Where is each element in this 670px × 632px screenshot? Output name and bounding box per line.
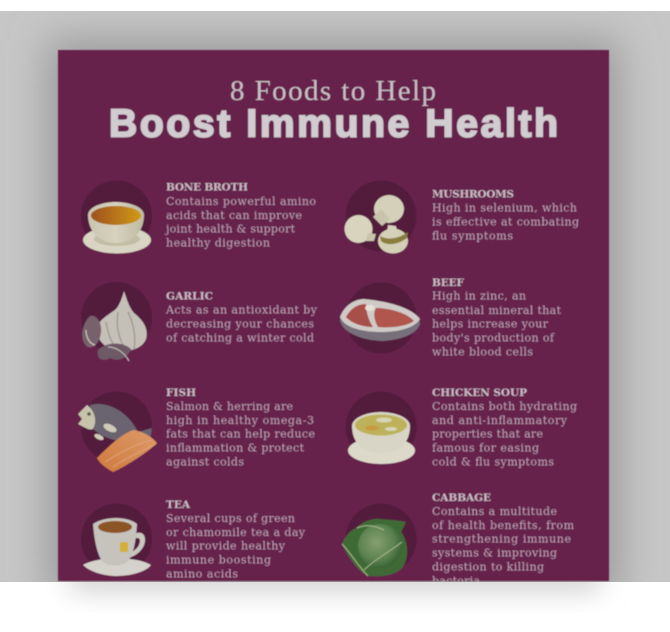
text: tea: Several cups of green (166, 512, 295, 525)
text: cabbage: systems & improving (432, 546, 557, 560)
text: beef: High in zinc, an (432, 290, 526, 302)
text: chicken soup: properties that are (432, 428, 543, 440)
text: mushrooms: is effective at combating (432, 216, 579, 228)
text: garlic: Acts as an antioxidant by (165, 304, 318, 316)
text: chicken soup (432, 387, 577, 468)
icon: cabbage (342, 504, 416, 576)
main panel (58, 50, 609, 581)
text: beef: essential mineral that (432, 304, 562, 317)
text: chicken soup: CHICKEN SOUP (432, 387, 527, 399)
title (109, 75, 558, 146)
text: beef: helps increase your (432, 318, 549, 330)
text: chicken soup: and anti-inflammatory (432, 414, 568, 427)
text: cabbage: bacteria (432, 574, 480, 588)
text: bone broth: acids that can improve (166, 209, 302, 222)
text: cabbage: Contains a multitude (432, 505, 557, 518)
item: fish (78, 387, 315, 472)
icon: fish and salmon (78, 392, 157, 472)
text: garlic (165, 290, 318, 344)
item: garlic (81, 282, 318, 361)
text: chicken soup: famous for easing (432, 442, 539, 454)
title line two: Boost Immune Health (109, 102, 558, 146)
text: mushrooms: High in selenium, which (432, 202, 577, 214)
text: mushrooms: MUSHROOMS (432, 188, 514, 200)
icon: bone broth bowl (81, 180, 152, 254)
text: fish: inflammation & protect (166, 442, 305, 454)
title line one: 8 Foods to Help (230, 75, 436, 107)
icon: beef steak (340, 282, 420, 354)
text: tea: TEA (166, 499, 191, 511)
item: bone broth (81, 180, 316, 254)
text: beef: white blood cells (432, 346, 533, 358)
text: tea: amino acids (166, 568, 238, 580)
text: fish: fats that can help reduce (166, 428, 315, 440)
text: fish: against colds (166, 456, 244, 468)
icon: chicken soup bowl (346, 392, 416, 464)
text: cabbage: CABBAGE (432, 492, 491, 504)
shadow beneath the backdrop (62, 582, 608, 603)
text: tea (166, 499, 306, 580)
text: bone broth: joint health & support (164, 222, 296, 236)
text: chicken soup: cold & flu symptoms (432, 456, 554, 468)
text: beef: body's production of (432, 332, 555, 344)
text: tea: or chamomile tea a day (166, 526, 306, 539)
text: cabbage: of health benefits, from (432, 519, 575, 532)
text: bone broth (164, 182, 316, 250)
text: bone broth: healthy digestion (166, 236, 270, 250)
text: cabbage (432, 492, 575, 588)
text: beef (432, 277, 562, 358)
text: beef: BEEF (432, 277, 465, 289)
text: fish: Salmon & herring are (166, 400, 293, 413)
text: bone broth: BONE BROTH (166, 182, 248, 194)
item: tea (81, 499, 306, 580)
text: mushrooms: flu symptoms (432, 230, 513, 242)
item: beef (340, 277, 562, 358)
text: bone broth: Contains powerful amino (166, 195, 316, 208)
text: garlic: GARLIC (166, 290, 213, 302)
text: fish (166, 387, 315, 468)
item: chicken soup (346, 387, 577, 468)
text: tea: will provide healthy (166, 540, 286, 552)
item: cabbage (342, 492, 575, 588)
text: tea: immune boosting (166, 554, 271, 566)
icon: garlic (81, 282, 152, 361)
item: mushrooms (344, 180, 579, 254)
icon: tea cup (81, 504, 152, 576)
text: mushrooms (432, 188, 579, 242)
text: fish: FISH (166, 387, 196, 399)
text: garlic: of catching a winter cold (166, 332, 314, 344)
text: cabbage: strengthening immune (432, 532, 571, 546)
text: cabbage: digestion to killing (432, 560, 544, 574)
icon: mushrooms (344, 180, 416, 254)
text: garlic: decreasing your chances (166, 318, 314, 330)
text: fish: high in healthy omega-3 (166, 414, 314, 427)
text: chicken soup: Contains both hydrating (432, 400, 577, 413)
